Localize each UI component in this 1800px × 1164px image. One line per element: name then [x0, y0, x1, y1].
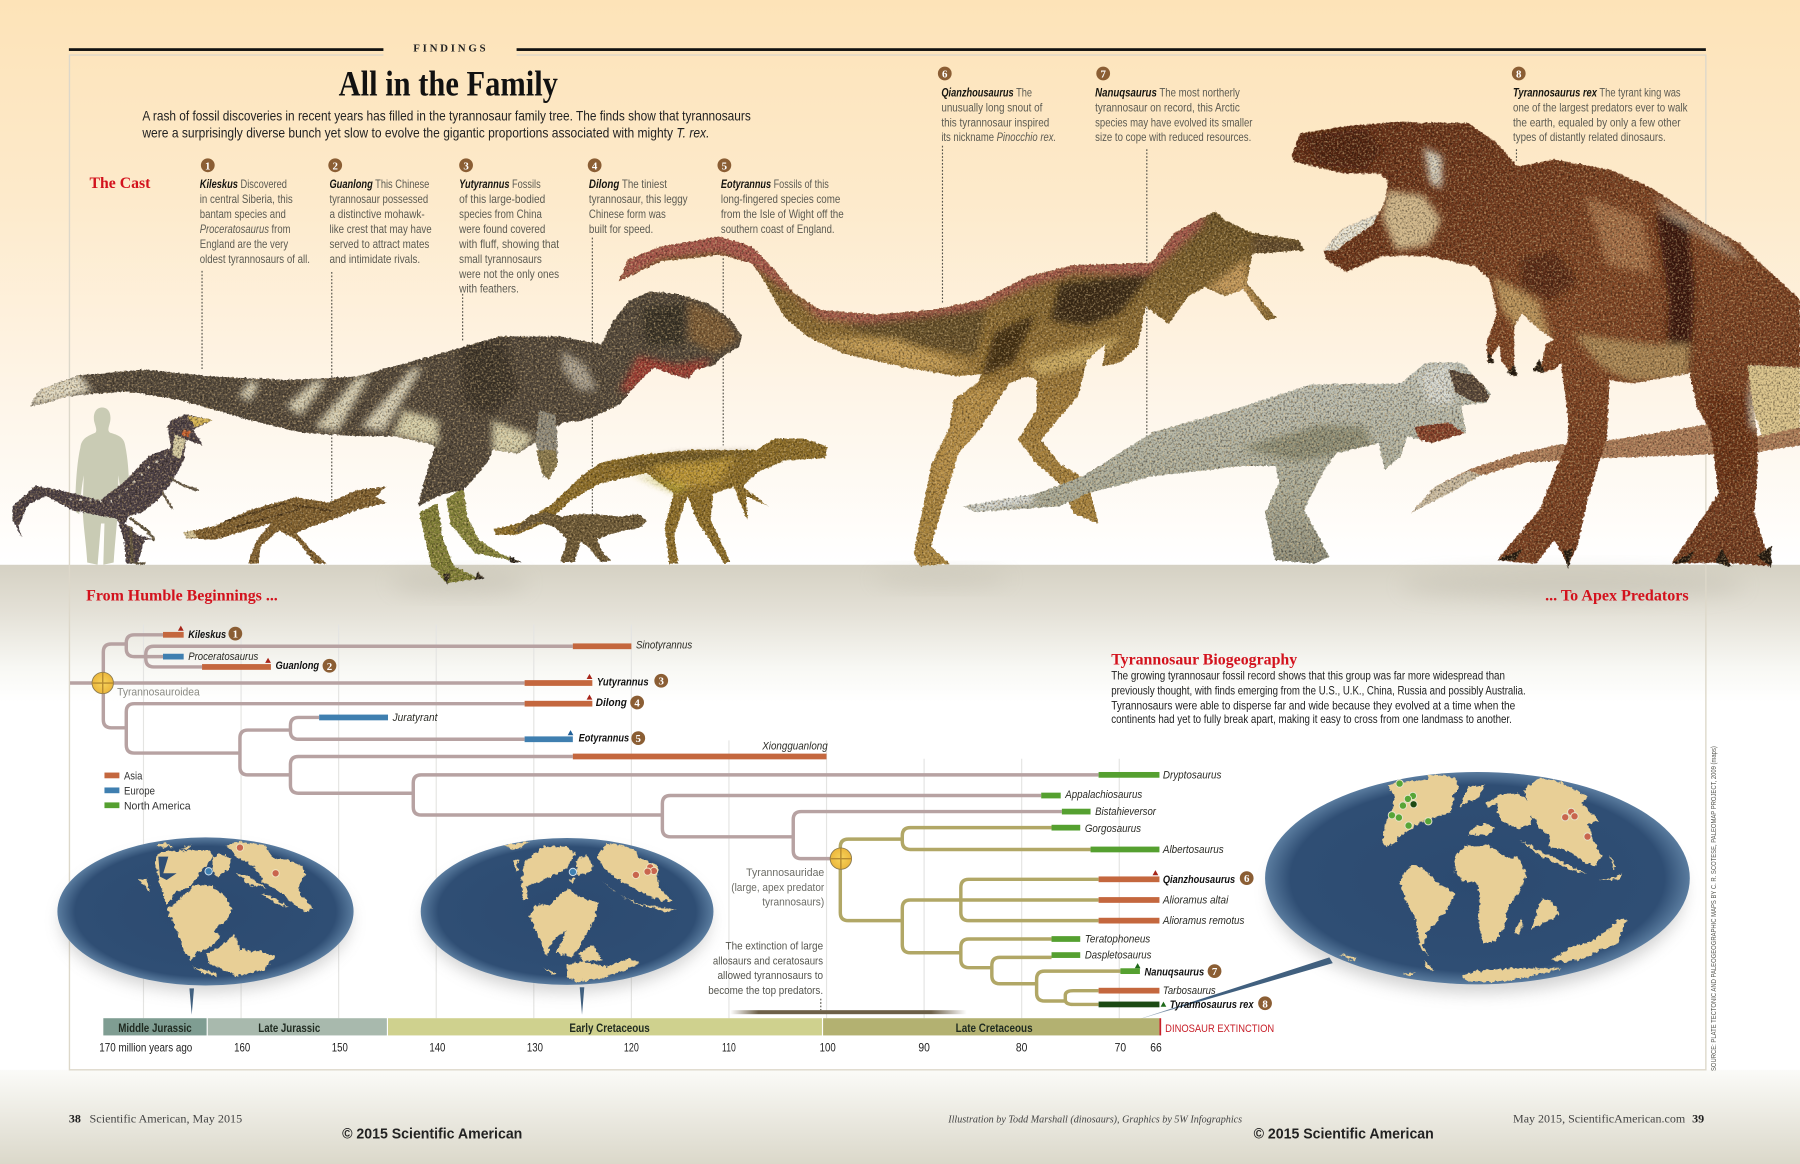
dinosaur 8: Tyrannosaurus rex — [1291, 122, 1800, 569]
cast entry 4: Dilong — [588, 158, 688, 236]
cast entry 3: Yutyrannus: Yutyrannus Fossils — [459, 177, 541, 191]
cast entry 7: Nanuqsaurus: 7 — [1100, 68, 1106, 80]
species labels: Alioramus altai — [1162, 894, 1229, 906]
species labels: Yutyrannus — [597, 676, 649, 688]
cast entry 1: Kileskus: Kileskus Discovered — [200, 177, 287, 191]
annotation: Tyrannosauridae: (large, apex predator — [731, 882, 824, 894]
species labels: 6 — [1244, 873, 1250, 885]
title: All in the Family — [339, 63, 558, 103]
cast entry 8: Tyrannosaurus rex — [1512, 67, 1688, 144]
species labels: 8 — [1262, 998, 1268, 1010]
time axis labels: 66 — [1150, 1041, 1162, 1055]
source credit: SOURCE: PLATE TECTONIC AND PALEOGEOGRAPHIC MAPS BY C. R. SCOTESE, PALEOMAP PROJECT, 2009 (maps) — [1711, 746, 1718, 1071]
cast entry 1: Kileskus: in central Siberia, this — [200, 192, 293, 206]
species labels: Alioramus remotus — [1162, 915, 1245, 927]
cast entry 5: Eotyrannus: from the Isle of Wight off the — [721, 207, 844, 221]
background: warm upper panel — [0, 0, 1800, 565]
species labels: Qianzhousaurus — [1163, 874, 1235, 886]
footer left: Scientific American, May 2015 — [90, 1112, 242, 1126]
species labels: Teratophoneus — [1085, 933, 1150, 945]
intro text — [141, 109, 751, 141]
time axis labels: 110 — [722, 1041, 736, 1055]
time axis labels: 80 — [1016, 1041, 1028, 1055]
species labels: 7 — [1212, 966, 1218, 978]
species labels: 3 — [658, 676, 664, 688]
map 2: Early Cretaceous globe — [421, 838, 713, 992]
cast entry 7: Nanuqsaurus: Nanuqsaurus The most northerly — [1095, 85, 1240, 99]
cast entry 1: Kileskus — [200, 158, 310, 266]
footer right: 39 — [1692, 1112, 1704, 1126]
node: Tyrannosauroidea — [92, 672, 200, 699]
fossil markers — [178, 626, 1166, 1007]
cast entry 6: Qianzhousaurus: Qianzhousaurus The — [941, 85, 1032, 99]
cast entry 8: Tyrannosaurus rex: the earth, equaled by only a few other — [1513, 115, 1681, 129]
cast entry 7: Nanuqsaurus: species may have evolved its smaller — [1095, 115, 1252, 129]
cast entry 4: Dilong: 4 — [592, 160, 598, 172]
cast entry 2: Guanlong: 2 — [332, 160, 338, 172]
time axis labels: 140 — [429, 1041, 446, 1055]
species labels: Albertosaurus — [1162, 844, 1224, 856]
time axis labels: 150 — [332, 1041, 348, 1055]
cast entry 2: Guanlong: and intimidate rivals. — [329, 252, 420, 266]
cast entry 2: Guanlong: like crest that may have — [329, 222, 432, 236]
cast entry 2: Guanlong: a distinctive mohawk- — [329, 207, 425, 221]
annotation: Tyrannosauridae: Tyrannosauridae — [746, 867, 824, 879]
section header: findings: FINDINGS — [413, 43, 486, 55]
legend: North America — [124, 800, 191, 812]
time axis labels: 120 — [624, 1041, 639, 1055]
dinosaur 7: Nanuqsaurus — [963, 360, 1492, 564]
species labels: Sinotyrannus — [636, 640, 692, 652]
species labels: 1 — [233, 629, 238, 641]
cast entry 8: Tyrannosaurus rex: one of the largest predators ever to walk — [1513, 100, 1688, 114]
biogeography text block: continents had yet to fully break apart, making it easy to cross from one landmass to another. — [1111, 712, 1512, 726]
cast entry 7: Nanuqsaurus: tyrannosaur on record, this Arctic — [1095, 100, 1240, 114]
pointer: map 2 — [580, 987, 584, 1015]
cast entry 2: Guanlong — [328, 158, 432, 266]
cast entry 4: Dilong: Chinese form was — [589, 207, 666, 221]
geologic timescale: Late Cretaceous — [956, 1021, 1033, 1035]
cast entry 2: Guanlong: tyrannosaur possessed — [329, 192, 428, 206]
page frame — [69, 55, 1706, 1070]
cast entry 6: Qianzhousaurus: its nickname Pinocchio rex. — [941, 130, 1056, 144]
dinosaur 3: Yutyrannus — [25, 292, 742, 584]
species labels: Nanuqsaurus — [1145, 967, 1204, 979]
cast entry 5: Eotyrannus: 5 — [722, 160, 728, 172]
map 1: Middle Jurassic globe — [57, 837, 354, 992]
species labels: Dryptosaurus — [1163, 769, 1222, 781]
cast entry 7: Nanuqsaurus — [1095, 67, 1252, 144]
cast entry 6: Qianzhousaurus: unusually long snout of — [941, 100, 1043, 114]
species labels: Tyrannosaurus rex — [1170, 999, 1254, 1011]
phylogenetic tree: Tyrannosauridae branches — [840, 828, 1120, 1004]
cast entry 3: Yutyrannus — [458, 158, 560, 296]
annotation: extinction of predators: The extinction of large — [726, 940, 823, 952]
cast entry 6: Qianzhousaurus: this tyrannosaur inspired — [941, 115, 1049, 129]
cast entry 5: Eotyrannus — [717, 158, 844, 236]
illustration credit: Illustration by Todd Marshall (dinosaurs), Graphics by 5W Infographics — [947, 1115, 1242, 1126]
cast entry 6: Qianzhousaurus: 6 — [942, 68, 948, 80]
legend: Europe — [124, 785, 155, 797]
cast entry 8: Tyrannosaurus rex: types of distantly related dinosaurs. — [1513, 130, 1666, 144]
species labels: Tarbosaurus — [1163, 985, 1216, 997]
timeline grid lines — [143, 624, 1119, 1018]
biogeography text block: Tyrannosaurs were able to disperse far and wide because they evolved at a time when the — [1111, 698, 1516, 712]
cast entry 4: Dilong: built for speed. — [589, 222, 653, 236]
cast entry 6: Qianzhousaurus — [938, 67, 1056, 144]
species labels: Eotyrannus — [579, 733, 629, 745]
annotation: extinction of predators: become the top predators. — [708, 985, 823, 997]
biogeography text block: previously thought, with finds emerging from the U.S., U.K., China, Russia and possibly Australia. — [1111, 683, 1526, 697]
cast entry 1: Kileskus: bantam species and — [200, 207, 286, 221]
species labels: 2 — [327, 661, 332, 673]
range bars — [163, 632, 1159, 1007]
background: ground band — [0, 565, 1800, 703]
pointer: map 3 — [1120, 957, 1333, 1025]
species labels: Juratyrant — [392, 712, 438, 724]
species labels: Proceratosaurus — [188, 651, 259, 663]
cast entry 3: Yutyrannus: were not the only ones — [458, 267, 559, 281]
cast entry 2: Guanlong: Guanlong This Chinese — [329, 177, 430, 191]
copyright left: © 2015 Scientific American — [342, 1127, 522, 1143]
annotation: extinction of predators — [708, 940, 967, 1014]
cast entry 1: Kileskus: Proceratosaurus from — [200, 222, 290, 236]
cast entry 3: Yutyrannus: were found covered — [458, 222, 545, 236]
map 3: Late Cretaceous globe — [1265, 772, 1690, 993]
species labels: 4 — [634, 698, 640, 710]
legend — [104, 770, 191, 812]
time axis labels: 70 — [1115, 1041, 1126, 1055]
heading: the cast: The Cast — [90, 175, 151, 192]
biogeography text block: The growing tyrannosaur fossil record shows that this group was far more widespread than — [1111, 669, 1505, 683]
dinosaur 2: Guanlong — [184, 487, 387, 564]
geologic timescale: Middle Jurassic — [118, 1021, 192, 1035]
species labels: Dilong — [596, 697, 627, 709]
species labels: Bistahieversor — [1095, 806, 1157, 818]
cast entry 7: Nanuqsaurus: size to cope with reduced resources. — [1095, 130, 1251, 144]
cast entry 4: Dilong: Dilong The tiniest — [589, 177, 667, 191]
species labels: Appalachiosaurus — [1064, 789, 1142, 801]
dotted leader lines — [202, 146, 1516, 530]
cast entry 8: Tyrannosaurus rex: 8 — [1516, 68, 1522, 80]
background: footer band — [0, 1070, 1800, 1164]
intro text: were a surprisingly diverse bunch yet slow to evolve the gigantic proportions associated with mighty T. rex. — [141, 126, 709, 141]
time axis labels: 130 — [527, 1041, 543, 1055]
cast entry 5: Eotyrannus: southern coast of England. — [721, 222, 835, 236]
time axis labels — [99, 1041, 1162, 1055]
dinosaur 4: Dilong — [514, 512, 647, 562]
geologic timescale: DINOSAUR EXTINCTION — [1165, 1023, 1274, 1035]
species labels: Daspletosaurus — [1085, 950, 1152, 962]
cast entry 2: Guanlong: served to attract mates — [329, 237, 429, 251]
species labels: 5 — [636, 733, 642, 745]
legend: Asia — [124, 770, 143, 782]
cast entry 3: Yutyrannus: 3 — [463, 160, 469, 172]
dinosaur 6: Qianzhousaurus — [614, 211, 1305, 566]
cast entry 8: Tyrannosaurus rex: Tyrannosaurus rex The tyrant king was — [1513, 85, 1681, 99]
node: Tyrannosauridae — [830, 848, 852, 869]
species labels — [188, 627, 1272, 1011]
species labels: Kileskus — [188, 629, 226, 641]
geologic timescale: Early Cretaceous — [569, 1021, 650, 1035]
cast entry 3: Yutyrannus: with fluff, showing that — [458, 237, 560, 251]
geologic timescale — [103, 1018, 1274, 1035]
footer right: May 2015, ScientificAmerican.com — [1513, 1112, 1686, 1126]
cast entry 3: Yutyrannus: of this large-bodied — [459, 192, 545, 206]
species labels: Guanlong — [276, 660, 319, 672]
cast entry 4: Dilong: tyrannosaur, this leggy — [589, 192, 688, 206]
annotation: extinction of predators: allosaurs and ceratosaurs — [713, 955, 823, 967]
cast entry 3: Yutyrannus: small tyrannosaurs — [459, 252, 542, 266]
human scale silhouette — [75, 408, 130, 565]
biogeography text block: Tyrannosaur Biogeography — [1111, 652, 1297, 669]
cast entry 3: Yutyrannus: species from China — [459, 207, 542, 221]
cast entry 1: Kileskus: England are the very — [200, 237, 288, 251]
heading: to apex predators: ... To Apex Predators — [1545, 587, 1689, 604]
intro text: A rash of fossil discoveries in recent years has filled in the tyrannosaur family tree. The finds show that tyrannosaurs — [142, 109, 751, 124]
time axis labels: 160 — [234, 1041, 250, 1055]
cast entry 5: Eotyrannus: Eotyrannus Fossils of this — [721, 177, 829, 191]
time axis labels: 100 — [820, 1041, 836, 1055]
annotation: extinction of predators: allowed tyrannosaurs to — [717, 970, 823, 982]
species labels: Gorgosaurus — [1085, 823, 1141, 835]
dinosaur 8: T. rex tail — [1411, 424, 1800, 513]
time axis labels: 170 million years ago — [99, 1041, 193, 1055]
phylogenetic tree: early branches — [70, 635, 1099, 859]
heading: from humble beginnings: From Humble Beginnings ... — [86, 587, 278, 604]
dinosaur 5: Eotyrannus — [494, 439, 828, 564]
pointer: map 1 — [189, 988, 194, 1015]
species labels: Xiongguanlong — [761, 741, 828, 753]
cast entry 1: Kileskus: 1 — [205, 160, 211, 172]
cast entry 1: Kileskus: oldest tyrannosaurs of all. — [200, 252, 310, 266]
cast entry 5: Eotyrannus: long-fingered species come — [721, 192, 841, 206]
node: Tyrannosauroidea: Tyrannosauroidea — [117, 687, 200, 699]
time axis labels: 90 — [918, 1041, 930, 1055]
copyright right: © 2015 Scientific American — [1254, 1127, 1434, 1143]
geologic timescale: Late Jurassic — [258, 1021, 321, 1035]
cast entry 3: Yutyrannus: with feathers. — [458, 282, 519, 296]
annotation: Tyrannosauridae: tyrannosaurs) — [762, 897, 824, 909]
annotation: Tyrannosauridae — [731, 867, 824, 909]
dinosaur 1: Kileskus — [13, 414, 212, 564]
footer left: 38 — [69, 1112, 81, 1126]
biogeography text block — [1111, 652, 1526, 726]
